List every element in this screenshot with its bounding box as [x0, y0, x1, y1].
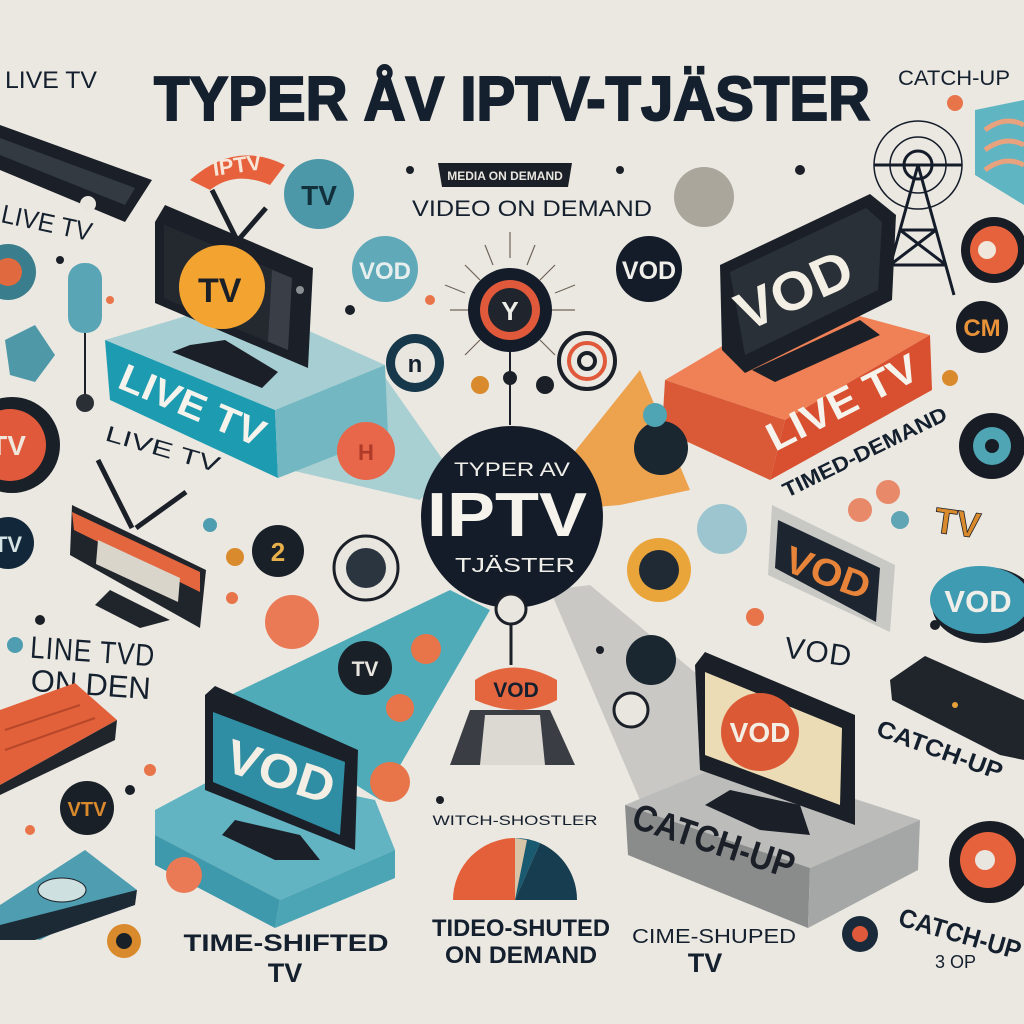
label: live tv top left: LIVE TV — [5, 67, 97, 94]
label: catch-up right: CATCH-UP — [873, 715, 1006, 786]
icon: television vod teal: VOD — [219, 730, 341, 815]
label: live tv mid left: LIVE TV — [103, 421, 223, 477]
label: cime-shuped tv — [632, 926, 796, 978]
label: tideo-shuted on demand: ON DEMAND — [445, 942, 597, 969]
icon: dark n circle — [386, 334, 444, 392]
icon: antenna tower — [874, 121, 962, 295]
label: gauge arc text: WITCH-SHOSTLER — [432, 812, 598, 828]
icon: vod ellipse — [930, 566, 1024, 643]
icon: teal waves top right — [975, 100, 1024, 205]
title: TYPER ÅV IPTV-TJÄSTER — [154, 65, 870, 134]
icon: teal pin — [697, 504, 747, 554]
label: time-shifted tv: TIME-SHIFTED — [184, 930, 388, 957]
icon: dark n circle: n — [408, 351, 422, 378]
icon: vtv disc: VTV — [68, 799, 107, 821]
icon: vod grey box right — [768, 505, 895, 632]
icon: vod badge with stand — [450, 594, 575, 765]
panel: vod teal — [155, 686, 395, 928]
icon: orange dot h: H — [358, 440, 374, 465]
label: live tv left: LIVE TV — [0, 199, 96, 247]
icon: television vod grey — [695, 652, 855, 835]
label: time-shifted tv: TV — [268, 958, 302, 988]
icon: orange dot on platform — [166, 857, 202, 893]
icon: spiral circle — [559, 333, 615, 389]
icon: center sunburst badge: Y — [501, 296, 519, 326]
label: on den: ON DEN — [30, 663, 152, 706]
panel: catch-up grey — [625, 652, 920, 928]
icon: blue remote — [68, 263, 102, 412]
label: time-shifted tv — [184, 930, 388, 988]
hub: center circle: IPTV — [427, 481, 587, 550]
icon: television vod grey: VOD — [730, 717, 790, 748]
label: cime-shuped tv: CIME-SHUPED — [632, 926, 796, 948]
icon: vod teal circle: VOD — [359, 258, 411, 285]
icon: television vod teal — [205, 686, 358, 860]
icon: small speech tv — [338, 641, 392, 695]
label: vod: VOD — [782, 632, 854, 674]
label: video on demand: VIDEO ON DEMAND — [412, 196, 652, 221]
label: catch-up on platform: CATCH-UP — [628, 796, 800, 887]
icon: gauge fan chart — [453, 838, 577, 900]
icon: dark disc near hub — [634, 403, 688, 475]
panel: live tv — [105, 190, 388, 478]
icon: small speech tv: TV — [352, 658, 378, 681]
icon: vod grey box right: VOD — [779, 539, 876, 609]
icon: orange dot h — [337, 422, 395, 480]
icon: tv teal circle — [284, 159, 354, 229]
icon: pink flower — [848, 480, 909, 529]
icon: emblem disc — [334, 536, 398, 600]
icon: vtv disc — [60, 781, 114, 835]
icon: set-top box top left — [0, 125, 152, 222]
icon: orange disc center-right — [627, 538, 691, 602]
icon: small left gadget — [0, 244, 36, 300]
icon: orange disc right — [961, 217, 1024, 283]
icon: black disc cm — [956, 301, 1008, 353]
label: small text under catch-up: 3 OP — [935, 952, 976, 972]
icon: tv disc left edge — [0, 397, 60, 493]
label: tideo-shuted on demand: TIDEO-SHUTED — [432, 915, 610, 942]
icon: set-top box bottom left — [0, 850, 137, 940]
hub: center circle — [421, 426, 603, 608]
icon: television with tv logo: TV — [198, 272, 242, 310]
icon: tv disc lower left — [0, 517, 34, 569]
icon: tv teal circle: TV — [301, 180, 337, 211]
icon: vod teal circle — [352, 236, 418, 302]
label: live tv on platform: LIVE TV — [112, 357, 272, 456]
hub: center circle: TJÄSTER — [455, 555, 575, 577]
label: live tv on orange platform: LIVE TV — [759, 346, 926, 460]
icon: dark cm disc — [626, 635, 676, 685]
icon: vod badge with stand: VOD — [493, 679, 539, 702]
icon: teal disc right — [959, 413, 1024, 479]
icon: number 2 disc — [252, 525, 304, 577]
label: tv orange: TV — [932, 499, 983, 546]
hub: center circle: TYPER AV — [454, 460, 570, 481]
icon: vod dark circle: VOD — [622, 257, 676, 285]
icon: small orange targets — [370, 694, 414, 802]
label: tideo-shuted on demand — [432, 915, 610, 969]
icon: television vod: VOD — [726, 239, 862, 343]
label: line tvd: LINE TVD — [29, 630, 156, 673]
scattered small dots — [7, 95, 963, 835]
icon: center sunburst badge — [445, 232, 575, 425]
icon: orange coin — [265, 595, 319, 649]
icon: teal speech blob — [5, 325, 55, 382]
icon: black disc cm: CM — [963, 315, 1001, 342]
label: timed-demand: TIMED-DEMAND — [779, 403, 951, 502]
panel: live tv orange — [662, 194, 932, 480]
icon: iptv speech badge: IPTV — [211, 149, 263, 181]
icon: iptv speech badge — [190, 149, 285, 190]
icon: orange dot — [411, 634, 441, 664]
icon: small ring — [614, 693, 648, 727]
icon: small coin bottom left — [107, 924, 141, 958]
icon: television vod — [720, 194, 896, 382]
icon: banner video on demand: MEDIA ON DEMAND — [447, 169, 563, 183]
icon: wood orange box left — [0, 683, 117, 795]
icon: television with tv logo — [155, 190, 313, 388]
icon: retro radio tv — [70, 460, 206, 628]
icon: vod ellipse: VOD — [944, 584, 1012, 619]
icon: banner video on demand — [438, 163, 572, 187]
label: cime-shuped tv: TV — [688, 948, 722, 978]
icon: vod dark circle — [616, 236, 682, 302]
icon: grey circle top — [674, 167, 734, 227]
icon: number 2 disc: 2 — [271, 537, 285, 567]
icon: orange disc bottom right — [949, 821, 1024, 903]
icon: set-top box right — [890, 656, 1024, 760]
light beams to hub — [220, 370, 800, 800]
icon: disc bottom — [842, 916, 878, 952]
label: catch-up top right: CATCH-UP — [898, 67, 1010, 90]
